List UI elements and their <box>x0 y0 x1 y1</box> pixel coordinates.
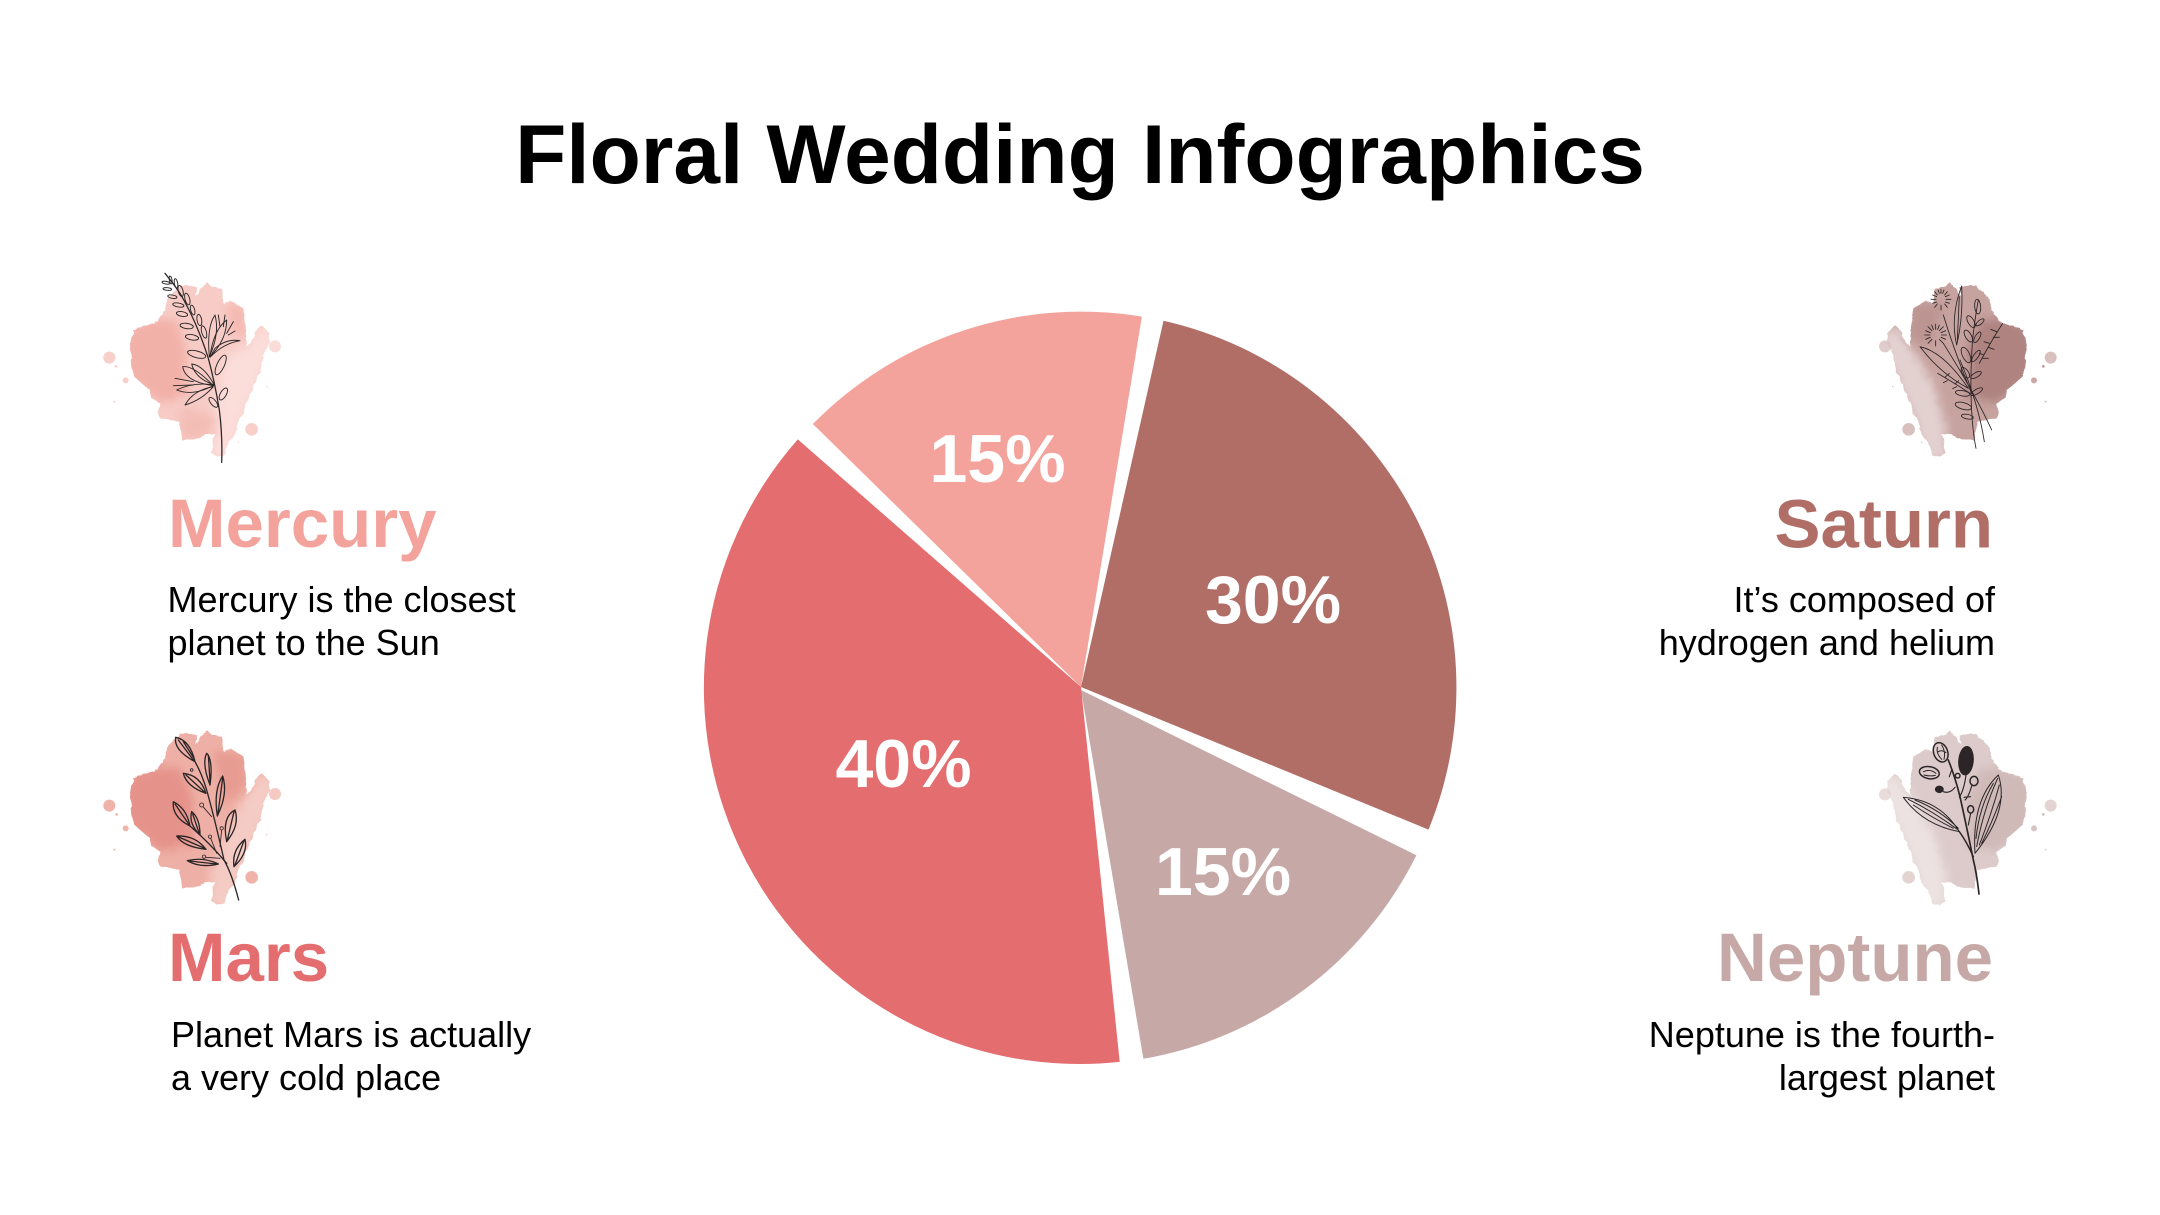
pie chart <box>704 312 1456 1064</box>
icon: Mercury watercolor sprig <box>103 273 281 462</box>
text: Mercury description: planet to the Sun <box>168 622 440 663</box>
text: Saturn description: It’s composed of <box>1734 579 1996 620</box>
text: Neptune description: largest planet <box>1779 1057 1995 1098</box>
icon: Neptune watercolor stem <box>1879 730 2057 908</box>
icon: Mars watercolor sprig <box>103 730 281 908</box>
title: Floral Wedding Infographics <box>515 107 1645 201</box>
label: 30% Saturn: 30% <box>1205 562 1341 638</box>
slice: Mercury 15% <box>813 312 1142 687</box>
heading: Saturn: Saturn <box>1774 486 1993 562</box>
text: Neptune description: Neptune is the fourth- <box>1649 1014 1995 1055</box>
label: 40% Mars: 40% <box>835 726 972 802</box>
heading: Mars: Mars <box>168 919 329 996</box>
text: Mars description: a very cold place <box>171 1057 441 1098</box>
text: Mercury description: Mercury is the closest <box>168 579 516 620</box>
slice: Mars 40% <box>704 439 1120 1064</box>
slice: Saturn 30% <box>1081 321 1456 830</box>
label: 15% Mercury: 15% <box>929 421 1066 497</box>
icon: Saturn watercolor bouquet <box>1879 282 2057 460</box>
text: Mars description: Planet Mars is actually <box>171 1014 531 1055</box>
slice: Neptune 15% <box>1081 690 1416 1059</box>
text: Saturn description: hydrogen and helium <box>1659 622 1995 663</box>
heading: Mercury: Mercury <box>168 485 436 562</box>
heading: Neptune: Neptune <box>1717 919 1993 996</box>
label: 15% Neptune: 15% <box>1155 834 1291 910</box>
